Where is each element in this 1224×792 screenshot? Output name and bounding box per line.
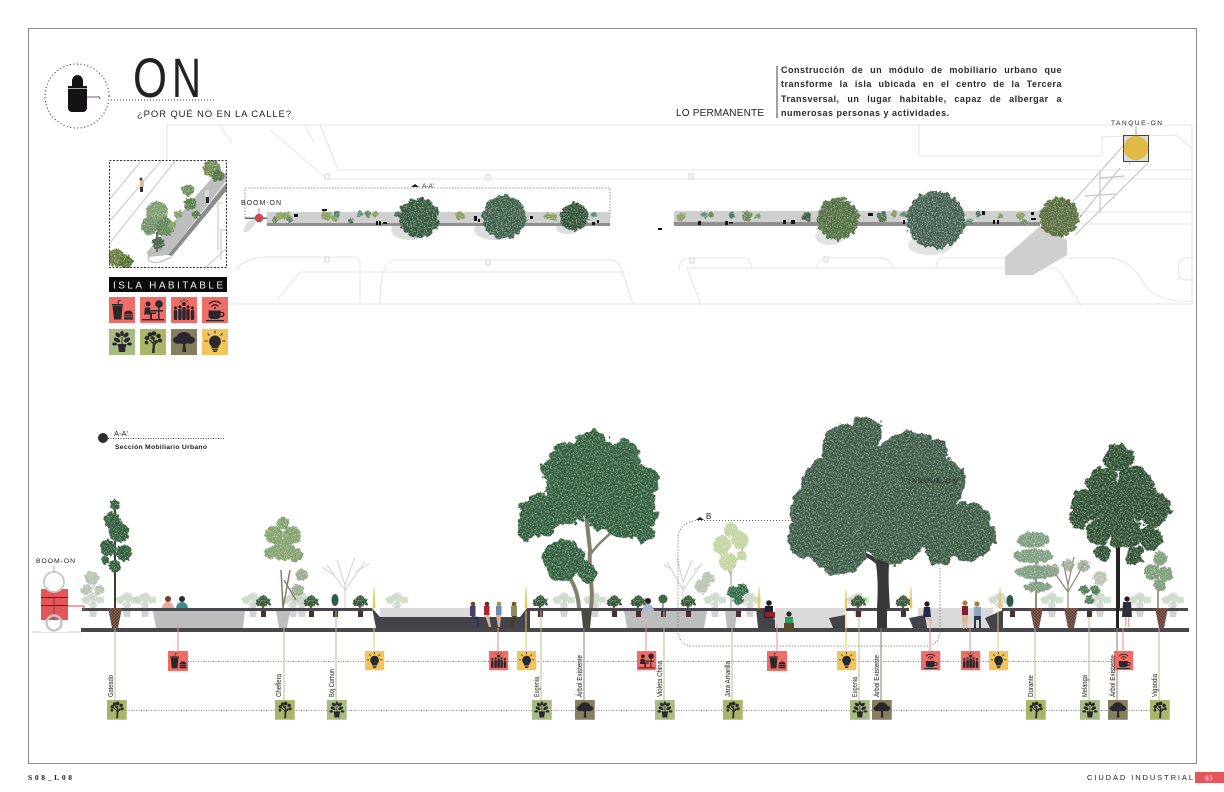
BOOM-ON label: BOOM-ON — [36, 558, 75, 565]
tree trunks at ground — [581, 608, 1119, 628]
top slab — [82, 608, 1188, 611]
island planting — [677, 211, 1027, 225]
icon: group — [171, 297, 197, 323]
detail B label: B — [706, 512, 711, 521]
plan tree 3 — [560, 203, 588, 231]
icon: ON module in dotted circle — [45, 64, 109, 128]
site plan — [167, 120, 1194, 305]
icon: food — [767, 651, 787, 671]
legend caption: Sección Mobiliario Urbano — [115, 444, 207, 451]
plant icons row — [107, 700, 1170, 720]
header: ON logo and title — [45, 46, 291, 128]
label: Boj Comun: Boj Comun — [329, 669, 336, 697]
subtitle: ¿POR QUÉ NO EN LA CALLE? — [137, 109, 291, 120]
icon: wifi coffee — [1114, 651, 1133, 670]
description text: transforme la isla ubicada en el centro de la Tercera — [781, 79, 1062, 89]
title ON: N — [172, 46, 201, 109]
dark tree — [1069, 444, 1171, 608]
large tree right — [787, 416, 996, 608]
icon: seating table — [140, 297, 166, 323]
icon: plant — [850, 700, 870, 720]
description text: numerosas personas y actividades. — [781, 108, 950, 118]
tree: Gateado — [100, 500, 132, 608]
urban section — [32, 416, 1189, 646]
tree: Melanga plant — [1079, 585, 1100, 605]
icon: plant — [109, 329, 135, 355]
title ON: O — [133, 46, 167, 109]
tree shadows — [242, 216, 580, 240]
icon: small tree — [275, 700, 295, 720]
label: Árbol Existente: Árbol Existente — [1108, 655, 1117, 697]
footer — [28, 772, 1224, 783]
label: Jara Amarilla: Jara Amarilla — [725, 661, 732, 697]
legend A-A': A-A' — [114, 429, 129, 438]
pale branch trees — [84, 557, 703, 608]
description text — [781, 65, 1062, 118]
activity row dotted line — [188, 660, 1130, 662]
island surface — [245, 212, 610, 226]
icon: group — [489, 651, 508, 670]
legend dotted line — [108, 438, 225, 440]
plan tree 4 — [817, 198, 859, 240]
BOOM-ON module — [41, 566, 84, 632]
label: Eugenia: Eugenia — [852, 677, 859, 697]
divider beside description — [776, 66, 778, 118]
label: Cheflera: Cheflera — [276, 674, 283, 697]
section label A-A': A-A' — [422, 183, 434, 190]
left island plan — [241, 183, 610, 240]
tree: Durante — [1013, 532, 1059, 608]
tree: branch planter — [1047, 557, 1090, 608]
icon: light — [202, 329, 228, 355]
tree shadows — [815, 227, 952, 255]
detail B outline — [678, 520, 940, 646]
tank — [1124, 127, 1148, 162]
icon: wifi coffee — [202, 297, 228, 323]
icon: group — [961, 651, 980, 670]
plant name labels — [108, 655, 1159, 697]
tree: Cheflera — [264, 517, 308, 608]
island people and furniture — [294, 209, 599, 225]
icon: seating table — [637, 651, 656, 670]
icon: food — [109, 297, 135, 323]
icon: large tree — [872, 700, 892, 720]
icon: small tree — [140, 329, 166, 355]
page number — [1195, 772, 1224, 783]
pale branch foliage — [81, 571, 1107, 595]
label: Vigandia: Vigandia — [1152, 674, 1159, 697]
heading: lo permanente: LO PERMANENTE — [676, 108, 764, 119]
isometric view — [107, 159, 227, 269]
icon: wifi coffee — [921, 651, 940, 670]
icon: food — [168, 651, 188, 671]
TANQUE-ON plan label: TANQUE-ON — [1111, 120, 1162, 127]
label: Violeta China: Violeta China — [657, 661, 664, 697]
legend dot — [98, 433, 108, 443]
island surface — [674, 211, 1040, 226]
tree: Vigandia — [1144, 551, 1173, 608]
title ON — [133, 46, 201, 109]
light benches — [380, 608, 993, 628]
BOOM-ON marker — [255, 208, 263, 222]
potted bushes — [256, 594, 1014, 608]
icon: plant — [327, 700, 347, 720]
icon: plant — [1080, 700, 1100, 720]
isla habitable panel — [107, 159, 228, 355]
icon: small tree — [1150, 700, 1170, 720]
label: Gateado: Gateado — [108, 675, 115, 697]
icon: small tree — [723, 700, 743, 720]
label: Durante: Durante — [1028, 675, 1035, 697]
section line A-A' — [245, 188, 610, 218]
label: Eugenia: Eugenia — [534, 677, 541, 697]
page number: 03 — [1205, 774, 1213, 782]
label: Melanga: Melanga — [1082, 675, 1089, 697]
dark pots — [261, 611, 1092, 617]
icon: small tree — [1026, 700, 1046, 720]
island people and furniture — [658, 211, 1036, 230]
BOOM-ON plan label: BOOM-ON — [241, 200, 281, 207]
label: Árbol Existente: Árbol Existente — [872, 655, 881, 697]
plant row dotted line — [126, 710, 1150, 712]
light bollards — [373, 587, 1001, 608]
section marker — [411, 184, 419, 187]
street context lines — [167, 125, 1194, 305]
island planting — [272, 211, 597, 224]
icon: small tree — [107, 700, 127, 720]
sheet code: S08_L08 — [28, 773, 72, 782]
right island plan — [658, 120, 1162, 275]
dark benches — [372, 608, 1003, 628]
plan tree 5 — [907, 191, 965, 249]
label bar — [109, 277, 227, 292]
icon: light — [517, 651, 536, 670]
icon: plant — [532, 700, 552, 720]
tank shadow — [1005, 226, 1067, 275]
description text: Construcción de un módulo de mobiliario urbano que — [781, 65, 1062, 75]
icon: plant — [655, 700, 675, 720]
tanque-on ghost label: TANQUE-ON — [907, 478, 957, 485]
plan tree 1 — [399, 198, 439, 238]
icon: large tree — [1108, 700, 1128, 720]
ghost plants behind — [82, 592, 1184, 617]
gray benches and planters — [153, 611, 737, 628]
icon: large tree — [171, 329, 197, 355]
label: Árbol Existente: Árbol Existente — [575, 655, 584, 697]
detail B marker — [696, 517, 704, 520]
large tree left — [516, 431, 659, 608]
description text: Transversal, un lugar habitable, capaz de albergar a — [781, 94, 1062, 104]
tree: Jara Amarilla — [713, 523, 749, 608]
leader lines — [115, 611, 1159, 700]
project name: CIUDAD INDUSTRIAL — [1087, 773, 1193, 782]
ground slab — [81, 628, 1189, 632]
activity icons row — [168, 651, 1133, 671]
ground line — [32, 631, 81, 633]
people — [162, 596, 1132, 632]
section legend — [98, 429, 225, 451]
lattice planters — [108, 608, 1168, 628]
tank ramps — [1070, 140, 1148, 235]
icon: light — [989, 651, 1008, 670]
icon: light — [837, 651, 856, 670]
lamp markers — [325, 174, 828, 265]
icon: light — [365, 651, 384, 670]
plan tree 6 — [1039, 197, 1079, 237]
dotted leader line — [111, 99, 216, 101]
icon: large tree — [575, 700, 595, 720]
label bar: ISLA HABITABLE — [113, 280, 223, 292]
plan tree 2 — [482, 195, 526, 239]
